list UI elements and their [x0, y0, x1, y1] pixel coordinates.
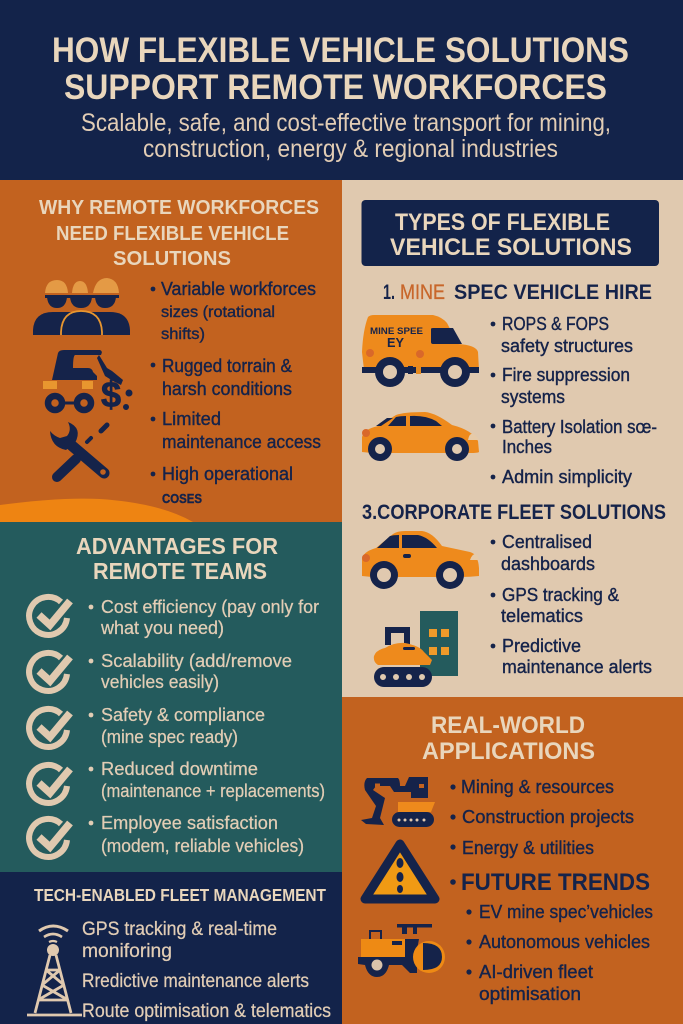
list: real-world applications: Energy & utilities — [462, 837, 594, 858]
icon: road roller — [358, 924, 445, 977]
list: future trends: optimisation — [479, 983, 581, 1004]
list: reasons — [151, 279, 321, 506]
heading: why: SOLUTIONS — [113, 247, 231, 270]
icon: building and bulldozer — [374, 611, 458, 687]
subtitle — [81, 109, 611, 163]
title: HOW FLEXIBLE VEHICLE SOLUTIONS — [52, 31, 629, 70]
list: tech features: moniforing — [82, 940, 172, 962]
list: advantages: Scalability (add/remove — [101, 650, 292, 671]
icon: rugged terrain vehicle and cost — [43, 350, 132, 415]
list: tech features: Rredictive maintenance alerts — [82, 970, 309, 992]
icon: crossed wrench and screwdriver — [50, 422, 107, 477]
list: mine spec features: Admin simplicity — [502, 466, 633, 487]
heading: advantages — [76, 533, 278, 584]
icon: corporate car — [362, 531, 479, 589]
list: advantages: Safety & compliance — [101, 704, 265, 725]
subheading: mine spec vehicle hire: 1. — [383, 280, 395, 304]
icon: orange car — [362, 412, 479, 461]
list: reasons: maintenance access — [162, 432, 321, 452]
list: reasons: Variable workforces — [161, 279, 316, 299]
heading: future trends: FUTURE TRENDS — [461, 869, 650, 896]
list: mine spec features: Fire suppression — [502, 364, 630, 385]
list: future trends: EV mine spec’vehicles — [479, 901, 653, 922]
list: advantages: Cost efficiency (pay only for — [101, 596, 319, 617]
list: real-world applications — [450, 776, 634, 858]
heading: advantages: REMOTE TEAMS — [93, 558, 267, 584]
header banner — [0, 0, 683, 180]
icon: mine spec van: MINE SPEE — [370, 326, 423, 336]
list: reasons: harsh conditions — [162, 379, 292, 399]
list: advantages: Employee satisfaction — [101, 812, 278, 833]
subtitle: construction, energy & regional industries — [143, 135, 558, 163]
list: future trends: Autonomous vehicles — [479, 931, 650, 952]
list: corporate fleet features: GPS tracking & — [502, 584, 620, 605]
list: tech features: Route optimisation & telematics — [82, 1000, 331, 1022]
list: mine spec features: Battery Isolation sœ- — [502, 416, 657, 437]
list: future trends: AI-driven fleet — [479, 961, 593, 982]
list: reasons: Rugged torrain & — [162, 356, 292, 376]
list: corporate fleet features: Centralised — [502, 531, 592, 552]
heading: advantages: ADVANTAGES FOR — [76, 533, 278, 559]
list: reasons: sizes (rotational — [161, 304, 275, 321]
panel: types of flexible vehicle solutions — [342, 180, 683, 697]
decorative hill — [0, 499, 193, 522]
heading: why: NEED FLEXIBLE VEHICLE — [56, 222, 289, 245]
icon: mine spec van — [362, 315, 479, 387]
list: future trends — [466, 901, 653, 1004]
icon: warning triangle — [365, 844, 435, 899]
list: tech features — [82, 918, 331, 1022]
icons: check marks — [29, 597, 70, 857]
list: mine spec features: Inches — [502, 436, 552, 457]
subheading: mine spec vehicle hire: MINE — [400, 280, 445, 304]
list: corporate fleet features: maintenance alerts — [502, 656, 652, 677]
icon: GPS tower — [27, 926, 82, 1015]
list: real-world applications: Construction projects — [462, 806, 634, 827]
panel: tech-enabled fleet management — [0, 872, 342, 1024]
list: mine spec features: systems — [501, 386, 565, 407]
list: advantages: (modem, reliable vehicles) — [101, 835, 304, 856]
list: reasons: High operational — [162, 464, 293, 484]
icon: excavator — [361, 777, 435, 827]
list: advantages — [89, 596, 325, 856]
list: reasons: Limited — [162, 409, 221, 429]
subheading: mine spec vehicle hire — [383, 280, 652, 304]
list: corporate fleet features: Predictive — [502, 635, 581, 656]
panel: why remote workforces need flexible vehicle solutions — [0, 180, 342, 522]
list: advantages: what you need) — [100, 617, 224, 638]
list: advantages: vehicles easily) — [101, 671, 219, 692]
heading: real-world applications — [422, 712, 595, 765]
list: advantages: Reduced downtime — [101, 758, 258, 779]
icon: workers with hard hats — [33, 278, 130, 335]
icon: rugged terrain vehicle and cost: $ — [101, 374, 121, 415]
list: advantages: (maintenance + replacements) — [101, 780, 325, 801]
panel: advantages for remote teams — [0, 522, 342, 872]
list: corporate fleet features: dashboards — [501, 553, 595, 574]
list: advantages: (mine spec ready) — [101, 726, 238, 747]
list: reasons: shifts) — [161, 326, 205, 343]
icon: mine spec van: EY — [387, 335, 404, 350]
subheading: mine spec vehicle hire: SPEC VEHICLE HIRE — [454, 280, 652, 304]
list: corporate fleet features — [491, 531, 652, 677]
heading: why: WHY REMOTE WORKFORCES — [39, 196, 319, 219]
heading box: types — [362, 200, 659, 266]
list: real-world applications: Mining & resources — [461, 776, 614, 797]
title: SUPPORT REMOTE WORKFORCES — [64, 68, 607, 107]
list: mine spec features: ROPS & FOPS — [502, 313, 609, 334]
heading: real-world applications: REAL-WORLD — [431, 712, 585, 739]
list: tech features: GPS tracking & real-time — [82, 918, 277, 940]
heading: tech-enabled: TECH-ENABLED FLEET MANAGEMENT — [34, 885, 326, 905]
subtitle: Scalable, safe, and cost-effective transport for mining, — [81, 109, 611, 137]
heading: why — [39, 196, 319, 270]
panel: real-world applications and future trends — [342, 697, 683, 1024]
list: mine spec features: safety structures — [501, 335, 633, 356]
heading box: types: TYPES OF FLEXIBLE — [395, 209, 610, 236]
list: reasons: COSES — [162, 491, 202, 506]
list: mine spec features — [491, 313, 657, 487]
title — [52, 31, 629, 107]
list: corporate fleet features: telematics — [501, 605, 583, 626]
heading: real-world applications: APPLICATIONS — [422, 738, 595, 765]
heading box: types: VEHICLE SOLUTIONS — [390, 234, 632, 261]
